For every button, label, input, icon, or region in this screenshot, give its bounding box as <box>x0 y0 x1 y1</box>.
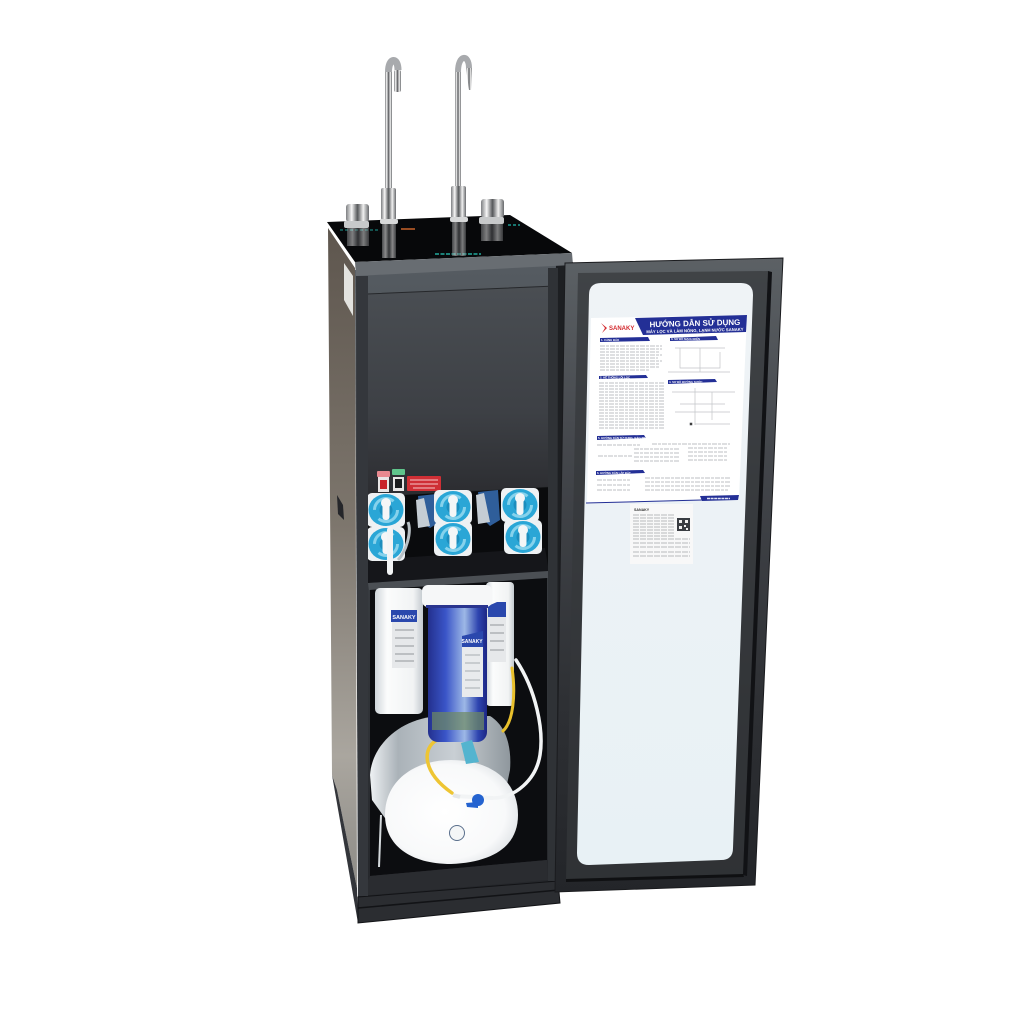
power switches <box>377 469 441 492</box>
upper panel <box>367 286 555 497</box>
QR code <box>677 518 690 531</box>
cabinet side panel <box>328 228 357 888</box>
blue valve <box>453 794 484 808</box>
left knob <box>344 204 369 246</box>
blue hoses behind filters <box>416 490 500 528</box>
plinth edge <box>332 775 358 923</box>
door recess <box>566 271 768 880</box>
circuit diagrams <box>668 348 735 426</box>
tank logo <box>450 826 464 840</box>
sheet title: HƯỚNG DẪN SỬ DỤNG <box>649 318 740 329</box>
side vent handle <box>337 495 344 520</box>
pressure tank <box>385 760 518 864</box>
door hinge gap <box>548 262 573 892</box>
door inner shadow strip <box>743 271 772 876</box>
section headers <box>596 336 718 475</box>
left faucet <box>380 60 401 258</box>
section header labels: 6. HƯỚNG DẪN LẮP ĐẶT <box>597 470 631 475</box>
section header labels: 2. HỆ THỐNG LÕI LỌC <box>600 374 630 380</box>
plinth step <box>358 881 560 923</box>
sheet header band <box>635 315 747 335</box>
small membrane filters <box>367 488 542 572</box>
right frame <box>548 268 558 881</box>
label background <box>630 504 693 564</box>
instruction sheet <box>586 315 747 503</box>
blue housing filter: SANAKY <box>461 639 483 645</box>
door bottom groove <box>566 874 744 882</box>
side sticker <box>344 263 353 316</box>
left frame highlight <box>356 276 368 896</box>
shelf front <box>368 571 548 590</box>
water purifier cabinet <box>327 215 573 923</box>
shelf surface <box>368 548 549 583</box>
open door <box>555 258 783 892</box>
section header labels: 5. HƯỚNG DẪN SỬ DỤNG, BẢO TRÌ <box>598 435 646 440</box>
tank drip line <box>379 815 381 867</box>
top band <box>355 253 573 276</box>
sheet background <box>587 315 747 503</box>
left white filter: SANAKY <box>392 615 416 621</box>
section header labels: 4. SƠ ĐỒ ĐƯỜNG NƯỚC <box>669 379 703 384</box>
front frame <box>355 262 560 898</box>
blue housing filter <box>422 585 492 742</box>
section header labels: 3. SƠ ĐỒ MẠCH ĐIỆN <box>671 336 700 341</box>
door frame <box>555 258 783 892</box>
white door panel <box>577 283 753 865</box>
pressure tank rear dome <box>370 716 510 820</box>
left white filter <box>375 588 423 714</box>
compartment floor <box>360 860 548 896</box>
fine print blocks <box>597 346 730 490</box>
product spec label <box>630 504 693 564</box>
sheet subtitle: MÁY LỌC VÀ LÀM NÓNG, LẠNH NƯỚC SANAKY <box>646 327 744 334</box>
right knob <box>479 199 504 241</box>
brand logo <box>601 323 634 333</box>
teal tag <box>461 740 479 764</box>
glass top <box>327 215 572 262</box>
section header labels <box>597 336 703 475</box>
glass markings <box>340 225 520 254</box>
right faucet <box>450 58 472 256</box>
spec lines <box>633 515 690 556</box>
yellow and white tubes <box>427 660 541 798</box>
sheet bottom line <box>586 500 702 503</box>
lower compartment <box>370 578 547 876</box>
upper compartment <box>368 487 552 583</box>
label logo: SANAKY <box>634 508 650 512</box>
plinth groove <box>358 890 559 908</box>
section header labels: 1. CẢNH BÁO <box>601 337 620 342</box>
hotline bar <box>700 495 739 501</box>
right white filter <box>486 582 514 706</box>
brand logo: SANAKY <box>609 326 634 332</box>
